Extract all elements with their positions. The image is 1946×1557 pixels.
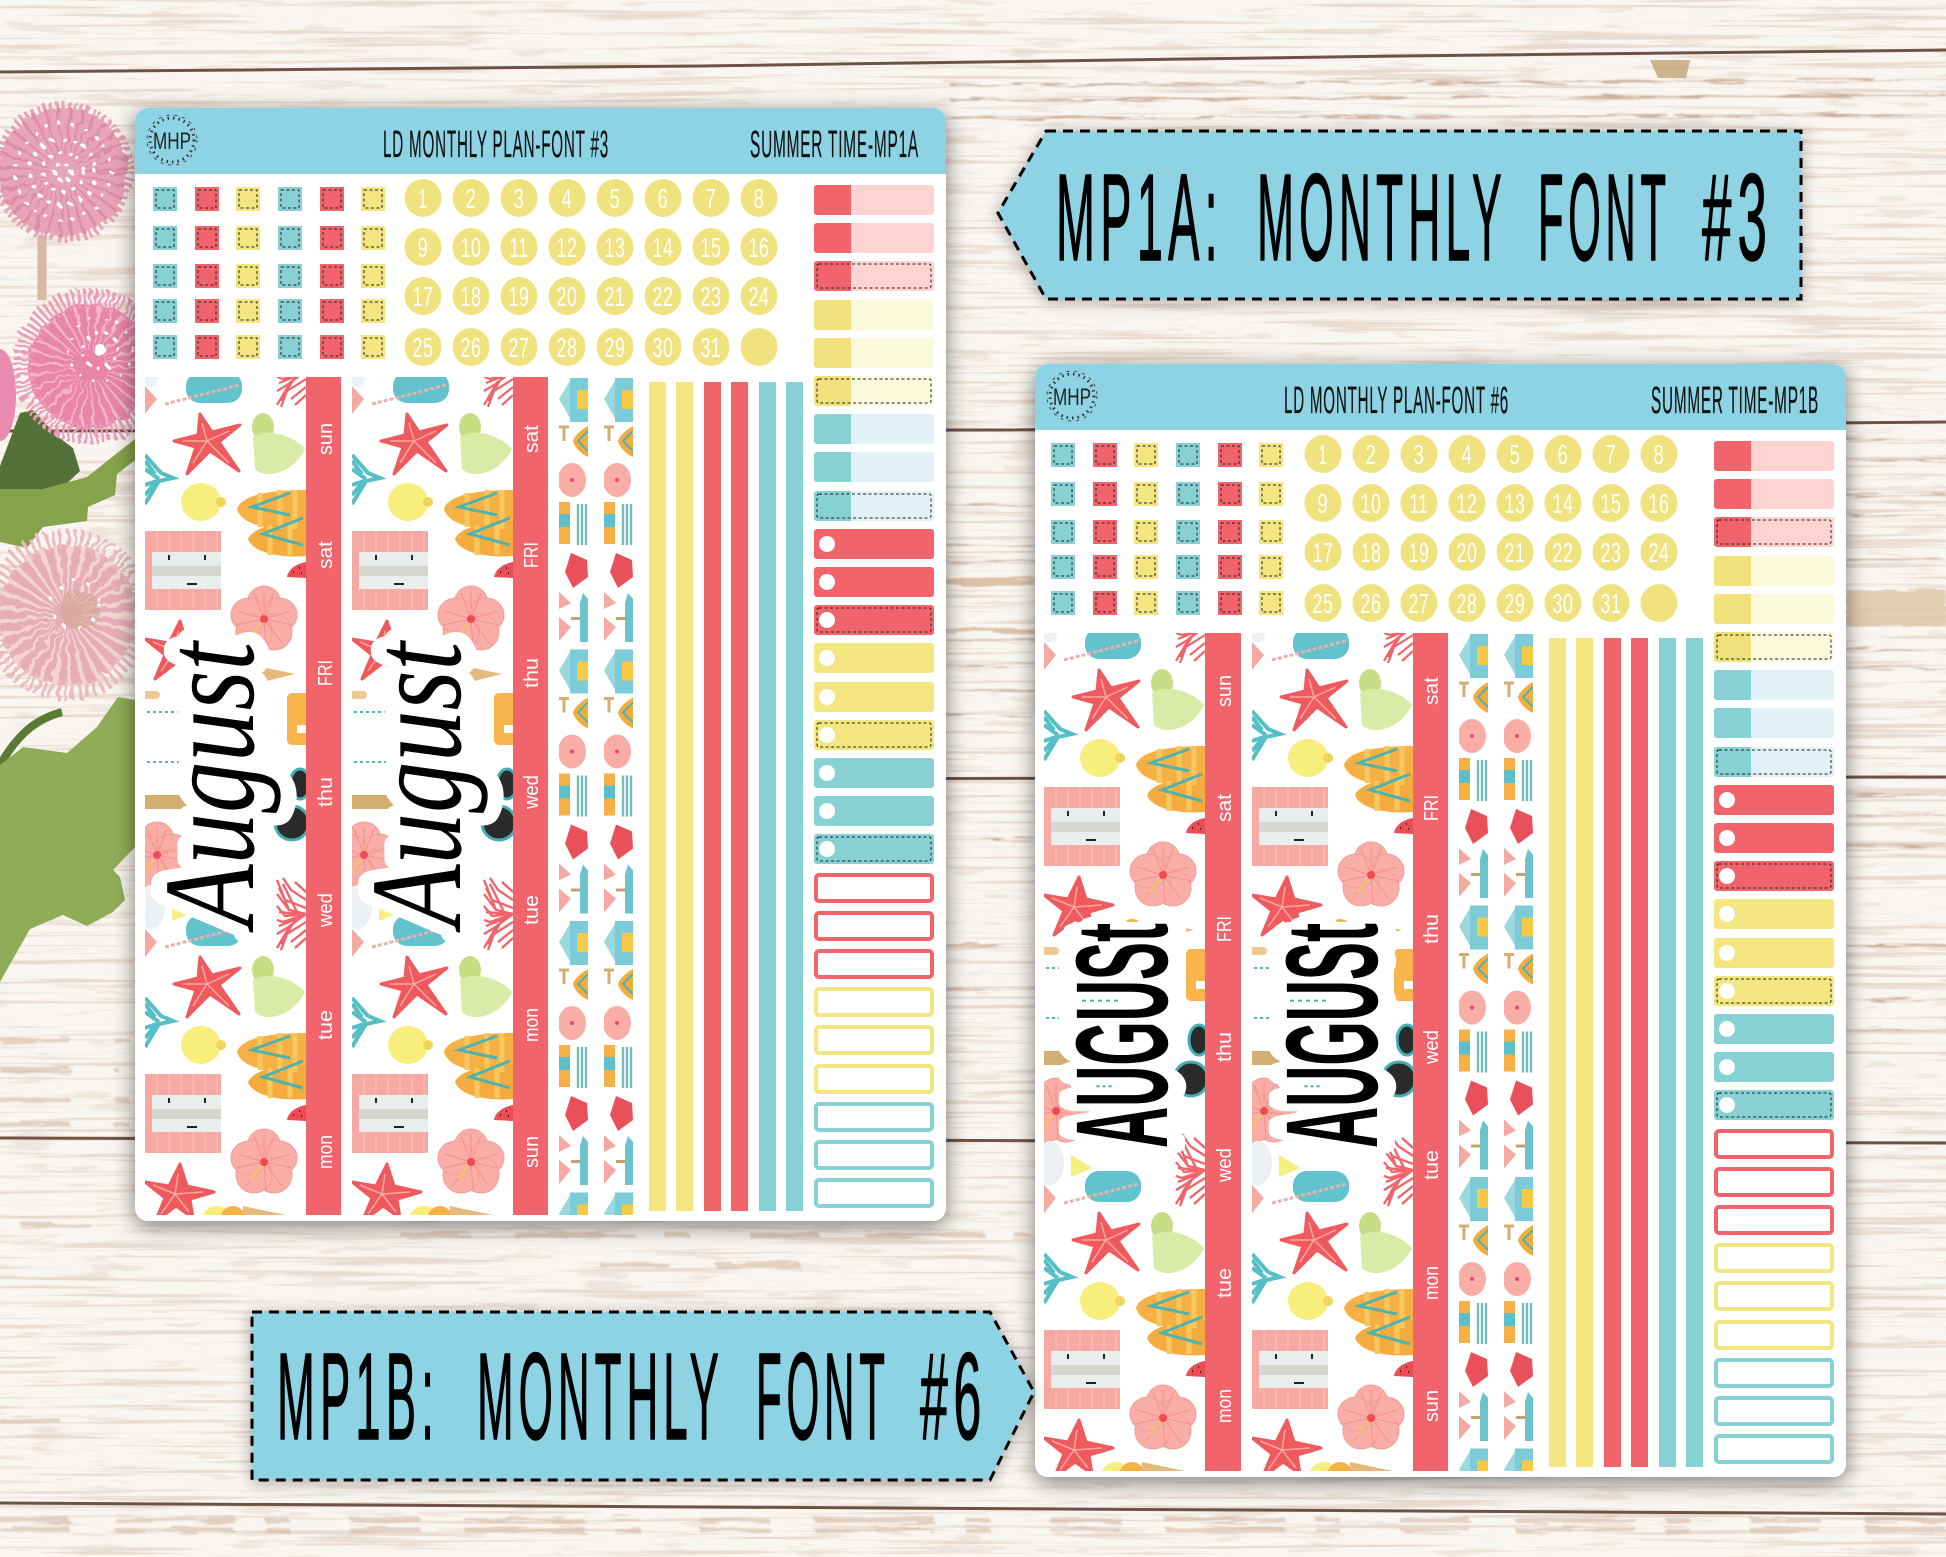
label MP1B: #6: [920, 1329, 987, 1466]
date circles: 28: [1456, 588, 1478, 619]
month panel 2: sat: [521, 425, 543, 453]
flower 2: [22, 298, 158, 434]
date circles: 23: [1600, 537, 1622, 568]
date circles: 7: [706, 183, 716, 214]
month panel 3: mon: [1214, 1389, 1236, 1423]
date circles: 20: [556, 281, 578, 312]
month panel 4: tue: [1421, 1150, 1443, 1180]
colour stripes: [649, 382, 803, 1211]
flower 1: [0, 108, 127, 236]
month panel 3: wed: [1214, 1148, 1236, 1183]
date circles: 15: [1600, 488, 1622, 519]
month panel 1: sat: [315, 541, 337, 569]
month panel 3: sun: [1214, 675, 1236, 707]
logo: MHP: [153, 128, 191, 155]
month panel 1: tue: [315, 1010, 337, 1040]
date circles: 7: [1606, 439, 1616, 470]
month panel 4: [1231, 591, 1448, 1490]
date circles: 31: [1600, 588, 1622, 619]
date circles: 22: [1552, 537, 1574, 568]
date circles: 1: [1318, 439, 1328, 470]
month panel 3: FRI: [1214, 916, 1236, 942]
date circles: 2: [466, 183, 476, 214]
date circles: 19: [1408, 537, 1430, 568]
month panel 3: AUGUSt: [1048, 923, 1195, 1148]
colour stripes: [1549, 638, 1703, 1467]
date circles: 21: [1504, 537, 1526, 568]
month panel 3: tue: [1214, 1268, 1236, 1298]
month panel 3: sat: [1214, 794, 1236, 822]
month panel 1: sun: [315, 423, 337, 455]
date circles: 19: [508, 281, 530, 312]
month panel 2: thu: [521, 658, 543, 688]
month panel 4: sat: [1421, 677, 1443, 705]
month panel 3: [1023, 591, 1241, 1490]
text: SUMMER TIME-MP1A: [750, 124, 919, 166]
date circles: 18: [460, 281, 482, 312]
label MP1A: FONT: [1538, 150, 1670, 287]
label MP1B: MONTHLY: [477, 1329, 723, 1466]
date circles: 1: [418, 183, 428, 214]
date circles: 28: [556, 332, 578, 363]
date circles: 13: [604, 232, 626, 263]
date circles: 25: [412, 332, 434, 363]
date circles: 14: [652, 232, 674, 263]
date circles: 2: [1366, 439, 1376, 470]
header bar MP1B: LD MONTHLY PLAN-FONT #6: [1284, 380, 1509, 422]
pattern strips: [1458, 634, 1533, 1492]
label MP1A: #3: [1702, 150, 1773, 287]
date circles: 21: [604, 281, 626, 312]
month panel 2: FRI: [521, 542, 543, 568]
date circles: 3: [514, 183, 524, 214]
date circles: 29: [604, 332, 626, 363]
date circles: 6: [658, 183, 668, 214]
date circles: 4: [1462, 439, 1472, 470]
date circles: 16: [1648, 488, 1670, 519]
pattern strips: [558, 378, 633, 1236]
date circles: 8: [754, 183, 764, 214]
date circles: 5: [610, 183, 620, 214]
month panel 1: wed: [315, 893, 337, 928]
date circles: 16: [748, 232, 770, 263]
date circles: 30: [652, 332, 674, 363]
date circles: 10: [1360, 488, 1382, 519]
date circles: 9: [418, 232, 428, 263]
flower 3: [0, 539, 143, 691]
month panel 1: [124, 335, 341, 1234]
date circles: 5: [1510, 439, 1520, 470]
month panel 4: thu: [1421, 914, 1443, 944]
month panel 2: tue: [521, 895, 543, 925]
date circles: 25: [1312, 588, 1334, 619]
month panel 4: sun: [1421, 1390, 1443, 1422]
date circles: 29: [1504, 588, 1526, 619]
date circles: 12: [556, 232, 578, 263]
month panel 4: mon: [1421, 1266, 1443, 1300]
decorative flowers and leaves: [0, 108, 158, 982]
header bar MP1B: [1035, 364, 1846, 430]
date circles: 30: [1552, 588, 1574, 619]
date circles: 11: [1410, 488, 1428, 519]
header bar MP1A: LD MONTHLY PLAN-FONT #3: [383, 124, 609, 166]
month panel 4: AUGUSt: [1258, 923, 1405, 1148]
date circles: 3: [1414, 439, 1424, 470]
date circles: 4: [562, 183, 572, 214]
date circles: 26: [460, 332, 482, 363]
month panel 2: August: [345, 640, 489, 933]
label MP1B: MP1B:: [277, 1329, 439, 1466]
label MP1B: FONT: [756, 1329, 889, 1466]
date circles: 17: [1312, 537, 1334, 568]
date circles: 18: [1360, 537, 1382, 568]
date circles: 8: [1654, 439, 1664, 470]
month panel 2: mon: [521, 1008, 543, 1042]
date circles: 27: [1408, 588, 1430, 619]
date circles: 11: [510, 232, 528, 263]
month panel 1: mon: [315, 1135, 337, 1169]
label MP1A: [998, 131, 1801, 299]
tab stickers: [814, 185, 934, 1206]
month panel 3: thu: [1214, 1032, 1236, 1062]
checkbox squares: [1051, 443, 1283, 615]
date circles: 10: [460, 232, 482, 263]
logo: [147, 115, 197, 165]
date circles: 31: [700, 332, 722, 363]
date circles: 13: [1504, 488, 1526, 519]
date circles: [404, 179, 778, 366]
label MP1A: MP1A:: [1056, 150, 1223, 287]
month panel 1: August: [138, 640, 282, 933]
header bar MP1A: [135, 108, 946, 174]
date circles: 27: [508, 332, 530, 363]
date circles: 23: [700, 281, 722, 312]
sticker sheet MP1A: [124, 108, 946, 1236]
month panel 2: [331, 335, 548, 1234]
month panel 2: sun: [521, 1136, 543, 1168]
date circles: 20: [1456, 537, 1478, 568]
date circles: [1304, 435, 1678, 622]
date circles: 24: [748, 281, 770, 312]
date circles: 12: [1456, 488, 1478, 519]
date circles: 24: [1648, 537, 1670, 568]
date circles: 17: [412, 281, 434, 312]
sticker sheet MP1B: [1023, 364, 1846, 1492]
month panel 1: thu: [315, 777, 337, 807]
month panel 1: FRI: [315, 660, 337, 686]
date circles: 26: [1360, 588, 1382, 619]
month panel 4: FRI: [1421, 795, 1443, 821]
checkbox squares: [153, 187, 385, 359]
date circles: 15: [700, 232, 722, 263]
date circles: 9: [1318, 488, 1328, 519]
logo: MHP: [1053, 384, 1091, 411]
date circles: 6: [1558, 439, 1568, 470]
label MP1B: [252, 1312, 1034, 1480]
month panel 4: wed: [1421, 1030, 1443, 1065]
date circles: 14: [1552, 488, 1574, 519]
label MP1A: MONTHLY: [1257, 150, 1506, 287]
date circles: 22: [652, 281, 674, 312]
logo: [1047, 371, 1097, 421]
tab stickers: [1714, 441, 1834, 1462]
month panel 2: wed: [521, 775, 543, 810]
